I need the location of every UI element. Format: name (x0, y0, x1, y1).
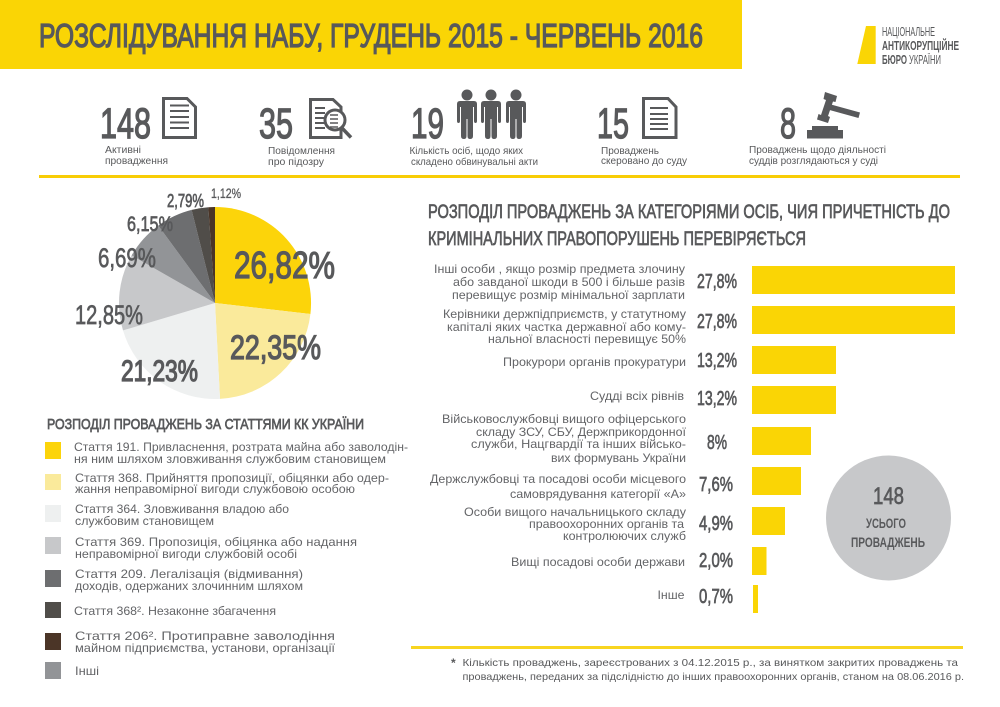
legend: Стаття 369. Пропозиція, обіцянка або надання (75, 535, 357, 549)
legend: Стаття 191. Привласнення, розтрата майна або заволодін- (74, 440, 408, 454)
header band (0, 0, 742, 69)
logo: БЮРО (882, 53, 907, 67)
stat: 15 sent to court (597, 98, 688, 167)
total circle: ПРОВАДЖЕНЬ (851, 534, 925, 550)
total circle: УСЬОГО (866, 515, 906, 531)
stat: 8 judges (749, 92, 886, 167)
stat: 19 persons indicted: складено обвинувальні акти (411, 156, 538, 168)
legend: Інші (75, 664, 99, 678)
row: civil servants (430, 467, 801, 501)
pie labels: 2,79% (167, 191, 204, 211)
stat: 19 persons indicted: Кількість осіб, щодо яких (410, 145, 524, 157)
stat: 148 active proceedings: Активні (105, 144, 141, 156)
stat: 19 persons indicted: 19 (411, 100, 444, 148)
row: judges (590, 386, 836, 414)
legend: жання неправомірної вигоди службовою особою (75, 482, 355, 496)
row: law enforcement: контролюючих служб (563, 529, 686, 543)
pie labels: 1,12% (211, 185, 241, 201)
row: heads of state enterprises: Керівники держпідприємств, у статутному (443, 307, 686, 321)
total circle: 148 (873, 483, 904, 510)
row: heads of state enterprises: капіталі яких частка державної або кому- (447, 320, 686, 334)
legend: Стаття 206². Протиправне заволодіння (75, 629, 335, 643)
row: military (442, 412, 811, 465)
legend: Стаття 368². Незаконне збагачення (74, 604, 276, 618)
row: judges: Судді всіх рівнів (590, 389, 684, 403)
row: law enforcement: 4,9% (699, 513, 733, 535)
pie labels (75, 185, 335, 388)
row: other persons: або завданої шкоди в 500 і більше разів (453, 275, 685, 289)
legend: службовим становищем (75, 514, 214, 528)
footnote: Кількість проваджень, зареєстрованих з 04.12.2015 р., за винятком закритих проваджень та (462, 657, 958, 669)
row: judges: 13,2% (697, 388, 737, 410)
row: other persons (434, 262, 955, 302)
legend: доходів, одержаних злочинним шляхом (75, 579, 303, 593)
row: heads of state enterprises (443, 306, 955, 346)
bar chart (430, 262, 955, 613)
pie labels: 26,82% (234, 245, 335, 287)
footnote: проваджень, переданих за підслідністю до інших правоохоронних органів, станом на 08.06.2016 р. (462, 671, 964, 683)
row: military: вих формувань України (551, 451, 686, 465)
legend heading: РОЗПОДІЛ ПРОВАДЖЕНЬ ЗА СТАТТЯМИ КК УКРАЇНИ (47, 416, 364, 433)
row: heads of state enterprises: нальної власності перевищує 50% (488, 332, 686, 346)
pie labels: 22,35% (230, 329, 321, 367)
row: prosecutors: 13,2% (697, 350, 737, 372)
row: prosecutors: Прокурори органів прокуратури (503, 355, 686, 369)
row: law enforcement (464, 505, 785, 543)
row: civil servants: Держслужбовці та посадові особи місцевого (430, 472, 686, 486)
stat: 148 active proceedings: провадження (105, 155, 168, 167)
pie labels: 6,15% (127, 213, 173, 236)
logo: НАЦІОНАЛЬНЕ (882, 25, 935, 39)
logo: АНТИКОРУПЦІЙНЕ (882, 38, 959, 53)
legend: Стаття 368. Прийняття пропозиції, обіцянки або одер- (75, 471, 389, 485)
total circle (826, 456, 951, 580)
legend: майном підприємства, установи, організації (75, 641, 336, 655)
stat: 35 notices of suspicion (259, 100, 351, 168)
row: civil servants: самоврядування категорії «А» (510, 487, 686, 501)
row: military: складу ЗСУ, СБУ, Держприкордонної (476, 425, 687, 439)
pie labels: 6,69% (98, 243, 156, 273)
row: civil servants: 7,6% (699, 474, 733, 496)
stat: 15 sent to court: 15 (597, 100, 629, 148)
stat: 8 judges: суддів розглядаються у суді (749, 155, 878, 167)
stat: 35 notices of suspicion: 35 (259, 100, 293, 148)
row: other persons: перевищує розмір мінімальної зарплати (452, 288, 685, 302)
stat: 15 sent to court: Проваджень (601, 145, 659, 157)
legend: ня ним шляхом зловживання службовим становищем (74, 452, 386, 466)
row: other persons: 27,8% (697, 271, 737, 293)
row: other: 0,7% (699, 586, 733, 608)
stat: 148 active proceedings (100, 98, 196, 167)
row: other: Інше (658, 588, 685, 602)
footnote: * (451, 656, 456, 670)
right heading: КРИМІНАЛЬНИХ ПРАВОПОРУШЕНЬ ПЕРЕВІРЯЄТЬСЯ (428, 229, 806, 250)
row: law enforcement: Особи вищого начальницького складу (464, 505, 686, 519)
row: prosecutors (503, 346, 836, 374)
legend: Стаття 364. Зловживання владою або (75, 502, 289, 516)
row: military: Військовослужбовці вищого офіцерського (442, 412, 686, 426)
row: other persons: Інші особи , якщо розмір предмета злочину (434, 262, 685, 276)
row: heads of state enterprises: 27,8% (697, 311, 737, 333)
legend: Стаття 209. Легалізація (відмивання) (75, 567, 303, 581)
stat: 19 persons indicted (410, 90, 538, 168)
pie chart (75, 185, 335, 399)
logo: УКРАЇНИ (909, 53, 941, 67)
title: РОЗСЛІДУВАННЯ НАБУ, ГРУДЕНЬ 2015 - ЧЕРВЕНЬ 2016 (39, 17, 703, 54)
row: military: служби, Нацгвардії та інших військо- (471, 437, 686, 451)
row: military: 8% (707, 432, 727, 454)
logo (857, 25, 959, 67)
stat: 8 judges: Проваджень щодо діяльності (749, 144, 886, 156)
stat: 15 sent to court: скеровано до суду (601, 155, 688, 167)
pie labels: 21,23% (121, 355, 198, 388)
pie labels: 12,85% (75, 300, 143, 330)
legend: неправомірної вигоди службовій особі (75, 547, 297, 561)
right heading (428, 202, 950, 250)
stat: 35 notices of suspicion: про підозру (268, 156, 325, 168)
row: top officials (511, 547, 766, 575)
footnote (451, 656, 964, 683)
row: top officials: Вищі посадові особи держави (511, 555, 685, 569)
row: top officials: 2,0% (699, 550, 733, 572)
stat: 8 judges: 8 (780, 100, 796, 148)
legend (45, 440, 408, 679)
row: other (658, 585, 758, 613)
stat: 35 notices of suspicion: Повідомлення (268, 145, 335, 157)
stat: 148 active proceedings: 148 (100, 100, 151, 148)
row: law enforcement: правоохоронних органів та (529, 517, 684, 531)
